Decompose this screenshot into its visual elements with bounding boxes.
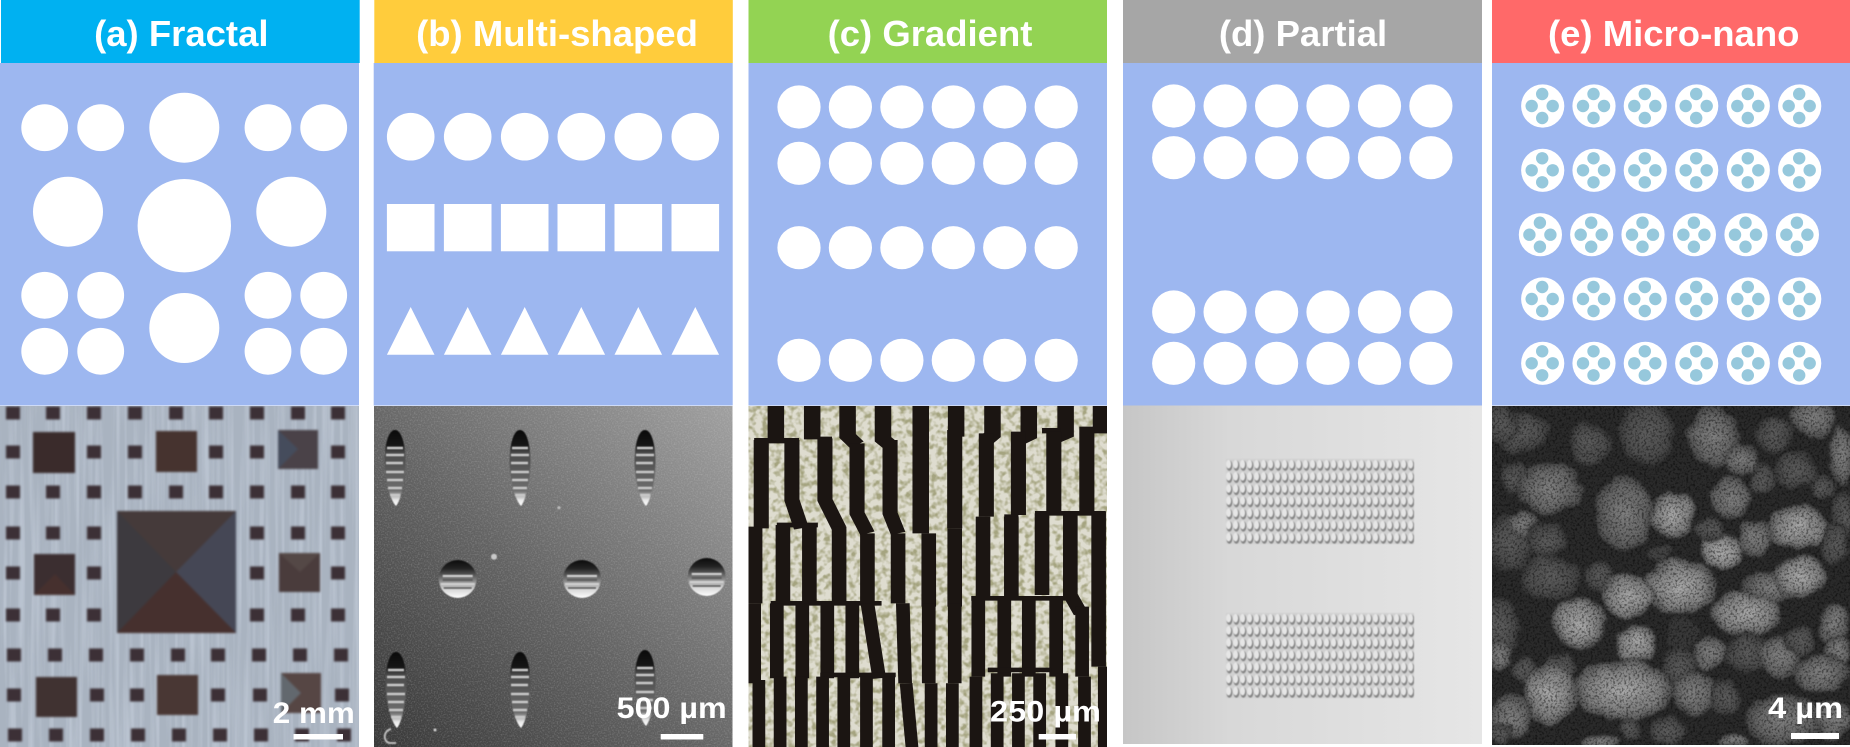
heading: (e) Micro-nano [1492, 0, 1850, 63]
panel: (a) Fractal [0, 0, 360, 747]
photo: fractal square pits on metal [0, 406, 359, 747]
scale label: 4 µm: 4 µm [1768, 692, 1843, 725]
heading: (c) Gradient: (c) Gradient [828, 13, 1032, 54]
heading: (a) Fractal: (a) Fractal [94, 13, 269, 54]
schematic: fractal hole pattern [0, 63, 359, 406]
photo: rendered surface with two dimple arrays [1123, 406, 1482, 744]
schematic: micro circles with nano dots [1492, 63, 1850, 406]
photo: micrograph of spindle and round dimples [374, 406, 732, 747]
schematic: circles, squares and triangles [374, 63, 733, 406]
scale bar: 4 µm [1791, 733, 1839, 739]
panel: (c) Gradient [748, 0, 1107, 747]
panel: (e) Micro-nano [1480, 0, 1850, 747]
scale bar: 500 µm [661, 734, 703, 740]
heading: (b) Multi-shaped: (b) Multi-shaped [416, 13, 698, 54]
schematic: rows with gradient spacing [748, 63, 1107, 406]
heading: (e) Micro-nano: (e) Micro-nano [1548, 13, 1799, 54]
scale label: 500 µm: 500 µm [617, 692, 727, 725]
scale bar: 250 µm [1039, 734, 1076, 740]
heading: (b) Multi-shaped [374, 0, 733, 63]
heading: (c) Gradient [748, 0, 1107, 63]
photo: SEM of micro-nano particle clusters [1480, 399, 1850, 747]
heading: (d) Partial [1123, 0, 1482, 63]
scale label: 250 µm: 250 µm [990, 696, 1101, 729]
heading: (d) Partial: (d) Partial [1219, 13, 1387, 54]
heading: (a) Fractal [1, 0, 360, 63]
schematic: two separated groups of rows [1123, 63, 1482, 406]
scale bar: 2 mm [294, 734, 343, 740]
panel: (b) Multi-shaped [374, 0, 733, 747]
photo: branching gradient stripes [748, 403, 1107, 747]
scale label: 2 mm: 2 mm [273, 697, 355, 730]
panel: (d) Partial [1123, 0, 1482, 744]
